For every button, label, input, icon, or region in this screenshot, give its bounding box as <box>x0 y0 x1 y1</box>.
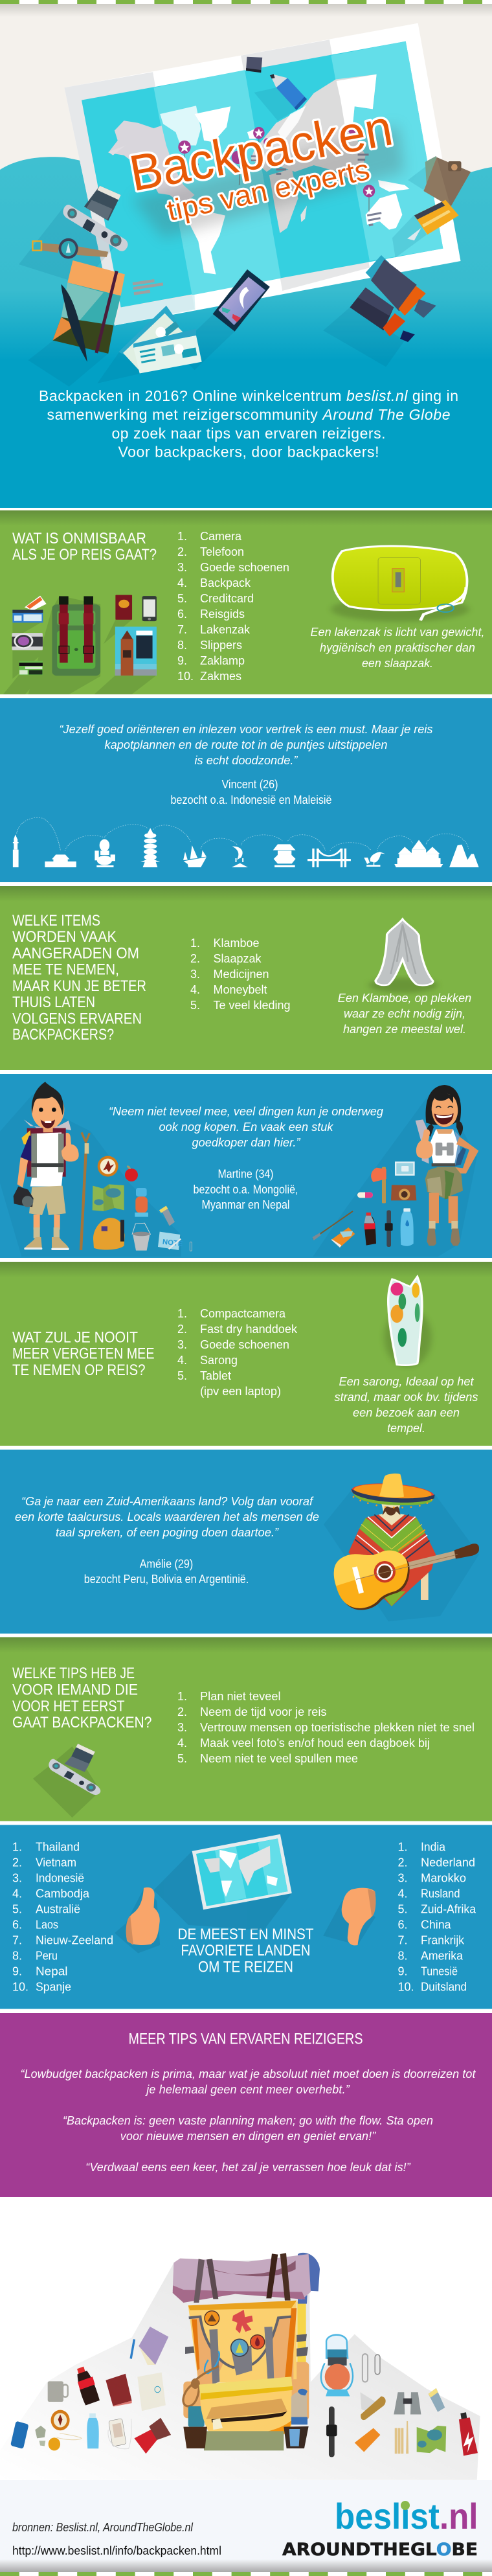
list of essentials: 1. <box>177 530 187 543</box>
caption: lakenzak: een slaapzak. <box>362 657 433 670</box>
icon: tickets <box>12 596 47 622</box>
list of tips: 1. <box>177 1690 187 1703</box>
list of essentials: Creditcard <box>200 592 254 605</box>
list of overrated items <box>190 937 290 1012</box>
panel: welke items <box>0 886 492 1070</box>
icon: flashlight <box>159 1206 175 1226</box>
attribution: Amélie (29) <box>140 1557 193 1570</box>
panel: footer <box>0 2480 492 2576</box>
list: least favourite countries: 1. <box>397 1841 408 1854</box>
list of tips: Neem de tijd voor je reis <box>200 1705 326 1718</box>
icon: thumbs up <box>126 1887 160 1945</box>
caption: sarong <box>334 1375 478 1435</box>
quote: een korte taalcursus. Locals waarderen het als mensen de <box>15 1510 319 1523</box>
icon: note pad <box>158 1232 183 1250</box>
icon: passport <box>115 595 132 620</box>
icon: brown camera <box>391 1185 416 1200</box>
attribution <box>193 1167 298 1211</box>
list of must-haves: (ipv een laptop) <box>200 1385 281 1398</box>
illustration: female backpacker with gear <box>313 1085 478 1257</box>
list of overrated items: Te veel kleding <box>214 999 290 1012</box>
icon: smartphone <box>213 269 270 332</box>
icon: mountains <box>449 845 479 867</box>
list of tips: Vertrouw mensen op toeristische plekken niet te snel <box>200 1721 475 1734</box>
attribution: Vincent (26) <box>221 778 278 791</box>
quote: “Neem niet teveel mee, veel dingen kun je onderweg <box>109 1105 383 1118</box>
list: least favourite countries: Rusland <box>421 1887 460 1900</box>
icon: dolphin fountain <box>232 847 248 867</box>
icon: treasure map <box>137 2373 166 2411</box>
panel: backpack illustration <box>0 2197 492 2480</box>
list: least favourite countries: 2. <box>397 1856 408 1869</box>
heading: MEER TIPS VAN ERVAREN REIZIGERS <box>128 2030 363 2048</box>
icon: red notebook <box>106 2374 132 2406</box>
list of essentials: Slippers <box>200 639 242 652</box>
heading <box>12 912 146 1043</box>
heading: WELKE ITEMS <box>12 912 100 929</box>
icon: phone with earphones <box>108 2419 131 2449</box>
map continents <box>108 74 421 274</box>
list of essentials: 10. <box>177 670 194 683</box>
icon: notebook and pen <box>131 2327 168 2365</box>
icon: suspension bridge <box>308 849 351 867</box>
icon: eraser <box>246 57 262 73</box>
list of tips: Maak veel foto’s en/of houd een dagboek bij <box>200 1737 430 1750</box>
list of essentials: 9. <box>177 654 187 667</box>
list: most favourite countries: Nieuw-Zeeland <box>36 1934 113 1947</box>
quote: goedkoper dan hier.” <box>192 1136 301 1149</box>
list: least favourite countries: 6. <box>397 1919 408 1932</box>
url: http://www.beslist.nl/info/backpacken.html <box>12 2544 221 2557</box>
icon: whistle <box>49 2434 82 2450</box>
icon: apple <box>125 1165 138 1181</box>
list of overrated items: 1. <box>190 937 200 950</box>
figure: female backpacker <box>416 1085 478 1246</box>
quotes: “Backpacken is: geen vaste planning maken; go with the flow. Sta open <box>63 2114 433 2127</box>
figure: face and moustache <box>379 1504 405 1525</box>
icon: stones <box>35 2426 46 2446</box>
list: most favourite countries: Laos <box>36 1919 58 1932</box>
icons: safety pin and paperclip <box>363 2354 380 2382</box>
icon: photo camera <box>12 633 43 650</box>
heading: WAT IS ONMISBAAR <box>12 530 146 547</box>
heading: TE NEMEN OP REIS? <box>12 1362 145 1379</box>
icon: soda can <box>10 2421 29 2449</box>
list of tips <box>177 1690 475 1765</box>
icon: axe <box>371 1167 386 1203</box>
icon: wallet <box>423 156 471 207</box>
illustration: travel gear flat lay <box>3 595 157 694</box>
figure: poncho <box>348 1514 436 1606</box>
panel: welke tips <box>0 1637 492 1821</box>
list: least favourite countries: 10. <box>397 1981 414 1994</box>
list: most favourite countries: Australië <box>36 1903 80 1916</box>
base and nets <box>183 2389 309 2450</box>
caption: lakenzak <box>311 626 484 670</box>
icon: temple <box>273 844 296 867</box>
icon: sports watch <box>326 2406 337 2457</box>
quotes: je helemaal geen cent meer overhebt.” <box>144 2083 350 2096</box>
icon: mini map <box>192 1834 292 1909</box>
top checker strip <box>0 0 492 4</box>
list: most favourite countries: Nepal <box>36 1965 67 1978</box>
panel: wat is onmisbaar <box>0 510 492 694</box>
heading: ALS JE OP REIS GAAT? <box>12 546 157 564</box>
title: tips van experts <box>164 153 372 227</box>
illustration: travel map with objects <box>19 23 471 387</box>
list: least favourite countries: Frankrijk <box>421 1934 465 1947</box>
illustrations: gear around backpack <box>10 2327 478 2457</box>
list: least favourite countries: 3. <box>397 1872 408 1885</box>
heading: GAAT BACKPACKEN? <box>12 1714 151 1731</box>
quotes: “Verdwaal eens een keer, het zal je verrassen hoe leuk dat is!” <box>85 2161 411 2174</box>
list: most favourite countries: 4. <box>12 1887 22 1900</box>
list: most favourite countries: 2. <box>12 1856 22 1869</box>
list of essentials: Goede schoenen <box>200 561 289 574</box>
attribution: bezocht o.a. Mongolië, <box>193 1183 298 1196</box>
heading <box>12 1329 154 1379</box>
icon: plane tickets <box>118 306 202 374</box>
quote: “Ga je naar een Zuid-Amerikaans land? Volg dan vooraf <box>21 1495 314 1508</box>
illustration: big backpack <box>173 2253 320 2450</box>
icon: backpack straps <box>52 596 100 676</box>
front pocket <box>199 2377 293 2443</box>
list of essentials: Reisgids <box>200 608 245 621</box>
list of must-haves: 3. <box>177 1338 187 1351</box>
illustration: asian landmarks skyline <box>13 817 479 867</box>
icon: pill <box>357 1192 373 1198</box>
list: least favourite countries: 4. <box>397 1887 408 1900</box>
icon: folding map <box>93 1184 124 1211</box>
list of essentials <box>177 530 289 683</box>
photo: mosquito net <box>369 919 438 993</box>
quote: kapotplannen en de route tot in de puntjes uitstippelen <box>105 738 387 751</box>
caption: klamboe: Een Klamboe, op plekken <box>338 992 471 1005</box>
figure: sombrero <box>351 1474 435 1509</box>
icon: soda bottle <box>364 1213 376 1246</box>
list: most favourite countries: 9. <box>12 1965 22 1978</box>
list: most favourite countries: Vietnam <box>36 1856 76 1869</box>
icon: sport watch <box>385 1210 393 1247</box>
icon: book <box>355 2428 380 2452</box>
heading: WELKE TIPS HEB JE <box>12 1665 135 1682</box>
icon: note pad: NOTE <box>162 1238 183 1248</box>
list of overrated items: 4. <box>190 983 200 996</box>
heading: MAAR KUN JE BETER <box>12 977 146 995</box>
heading: DE MEEST EN MINST <box>177 1926 314 1943</box>
list of tips: Plan niet teveel <box>200 1690 281 1703</box>
icon: pagoda <box>140 828 160 867</box>
list of overrated items: 3. <box>190 968 200 981</box>
caption: sarong: tempel. <box>387 1422 425 1435</box>
icon: credit card <box>414 200 459 234</box>
caption: lakenzak: Een lakenzak is licht van gewicht, <box>311 626 484 639</box>
main body <box>188 2301 296 2385</box>
heading: THUIS LATEN <box>12 994 95 1011</box>
photo: sarong <box>385 1277 431 1367</box>
list of overrated items: Medicijnen <box>214 968 269 981</box>
caption: lakenzak: hygiënisch en praktischer dan <box>320 641 475 654</box>
icon: binoculars <box>394 2392 421 2415</box>
panel: quote Vincent <box>0 698 492 882</box>
icon: junk boat <box>183 845 207 867</box>
icon: gate <box>45 854 76 867</box>
list: most favourite countries: 6. <box>12 1919 22 1932</box>
illustration: male backpacker with gear <box>0 1082 192 1257</box>
list of tips: 5. <box>177 1752 187 1765</box>
icon: fishing rod <box>313 1211 353 1240</box>
badges <box>205 2310 265 2356</box>
list of must-haves: 1. <box>177 1307 187 1320</box>
list of essentials: Lakenzak <box>200 623 251 636</box>
caption: sarong: strand, maar ook bv. tijdens <box>334 1391 478 1404</box>
icon: book <box>331 1227 355 1248</box>
list: least favourite countries <box>397 1841 476 1994</box>
heading <box>12 530 157 564</box>
list: most favourite countries: Peru <box>36 1950 58 1963</box>
list of tips: 2. <box>177 1705 187 1718</box>
icon: compass <box>98 1156 118 1177</box>
icon: herons <box>364 852 385 867</box>
caption: sarong: een bezoek aan een <box>353 1406 460 1419</box>
list of must-haves <box>177 1307 298 1398</box>
list: most favourite countries: 8. <box>12 1950 22 1963</box>
long object shadows <box>19 87 437 387</box>
list: most favourite countries: 7. <box>12 1934 22 1947</box>
shovel <box>297 2253 320 2364</box>
list: least favourite countries: Nederland <box>421 1856 475 1869</box>
icon: walking stick <box>81 1132 89 1250</box>
quotes: “Lowbudget backpacken is prima, maar wat je absoluut niet moet doen is doorreizen tot <box>21 2068 476 2080</box>
figure: guitar <box>334 1544 479 1610</box>
shadow behind title <box>132 126 405 238</box>
icon: lantern <box>321 2335 353 2397</box>
heading <box>12 1665 151 1731</box>
list of essentials: Camera <box>200 530 242 543</box>
icon: flashlight <box>429 2388 445 2412</box>
heading: WAT ZUL JE NOOIT <box>12 1329 138 1346</box>
sleeping mat <box>173 2253 311 2303</box>
illustrations: map and thumbs <box>115 1834 375 1953</box>
icon: palace <box>394 840 443 867</box>
list of overrated items: 5. <box>190 999 200 1012</box>
list of essentials: 2. <box>177 545 187 558</box>
attribution <box>171 778 331 806</box>
icon: lantern <box>135 1188 148 1217</box>
list: least favourite countries: China <box>421 1919 451 1932</box>
list: most favourite countries: 5. <box>12 1903 22 1916</box>
sources: bronnen: Beslist.nl, AroundTheGlobe.nl <box>12 2521 194 2534</box>
icon: pocket knife <box>360 2392 386 2420</box>
list of overrated items: Moneybelt <box>214 983 267 996</box>
icon: notebook with feather <box>52 260 125 362</box>
panel: meer tips <box>0 2013 492 2197</box>
list of must-haves: Sarong <box>200 1354 238 1367</box>
illustration: mariachi with guitar <box>324 1474 479 1621</box>
icon: minaret <box>13 834 19 867</box>
icon: buddha statue <box>95 839 115 867</box>
icon: camera <box>63 186 128 251</box>
attribution <box>84 1557 249 1586</box>
icon: thumbs down <box>342 1888 375 1945</box>
heading: AANGERADEN OM <box>12 944 139 963</box>
icon: water bottle <box>87 2413 99 2448</box>
heading <box>177 1926 314 1976</box>
icon: chocolate <box>134 2418 171 2454</box>
list of must-haves: Compactcamera <box>200 1307 286 1320</box>
map sheet <box>64 23 461 326</box>
icon: wristwatch <box>32 238 108 258</box>
list of overrated items: Slaapzak <box>214 952 262 965</box>
quote: is echt doodzonde.” <box>194 754 298 767</box>
quote: ook nog kopen. En vaak een stuk <box>159 1121 334 1134</box>
intro text <box>39 387 458 460</box>
list of tips: Neem niet te veel spullen mee <box>200 1752 358 1765</box>
map pins and labels <box>133 124 383 295</box>
intro text: samenwerking met reizigerscommunity Around The Globe <box>47 406 451 423</box>
list: least favourite countries: Marokko <box>421 1872 466 1885</box>
icon: marker <box>270 74 307 110</box>
intro text: op zoek naar tips van ervaren reizigers. <box>111 425 386 442</box>
list of must-haves: 2. <box>177 1323 187 1336</box>
heading: MEER VERGETEN MEE <box>12 1345 154 1363</box>
caption: sarong: Een sarong, Ideaal op het <box>339 1375 475 1388</box>
list: most favourite countries: 1. <box>12 1841 22 1854</box>
list of essentials: 6. <box>177 608 187 621</box>
carabiner and rope <box>183 2351 219 2427</box>
quote <box>60 723 432 767</box>
icon: folding map <box>417 2426 446 2453</box>
caption: klamboe: waar ze echt nodig zijn, <box>344 1007 465 1020</box>
list: most favourite countries: 10. <box>12 1981 28 1994</box>
list of essentials: Zakmes <box>200 670 241 683</box>
list: least favourite countries: Tunesië <box>421 1965 458 1978</box>
list: least favourite countries: 9. <box>397 1965 408 1978</box>
list: most favourite countries: 3. <box>12 1872 22 1885</box>
list: most favourite countries <box>12 1841 113 1994</box>
icon: phone map <box>142 596 157 621</box>
list of essentials: 3. <box>177 561 187 574</box>
icon: safety pin <box>190 1242 192 1251</box>
list of must-haves: 5. <box>177 1369 187 1382</box>
bottom checker strip <box>0 2572 492 2576</box>
heading: BACKPACKERS? <box>12 1026 114 1043</box>
list of must-haves: Fast dry handdoek <box>200 1323 298 1336</box>
list: least favourite countries: Duitsland <box>421 1981 467 1994</box>
quote: taal spreken, of een poging doen daartoe.” <box>56 1526 279 1539</box>
list of overrated items: Klamboe <box>214 937 259 950</box>
attribution: Myanmar en Nepal <box>202 1198 290 1211</box>
panel: quote Martine <box>0 1074 492 1258</box>
heading: WORDEN VAAK <box>12 928 117 946</box>
list: least favourite countries: India <box>421 1841 446 1854</box>
panel: favoriete landen <box>0 1825 492 2009</box>
icon: matches <box>395 2421 408 2454</box>
list of overrated items: 2. <box>190 952 200 965</box>
icon: bank card <box>19 661 43 675</box>
heading: VOLGENS ERVAREN <box>12 1010 142 1027</box>
list: most favourite countries: Cambodja <box>36 1887 90 1900</box>
list: least favourite countries: Zuid-Afrika <box>421 1903 476 1916</box>
list: least favourite countries: 8. <box>397 1950 408 1963</box>
list: least favourite countries: 5. <box>397 1903 408 1916</box>
icon: red sports bottle <box>457 2411 478 2456</box>
list of essentials: 4. <box>177 576 187 589</box>
heading: FAVORIETE LANDEN <box>181 1942 311 1959</box>
quote <box>15 1495 319 1539</box>
icon: camera <box>33 1744 100 1818</box>
attribution: bezocht o.a. Indonesië en Maleisië <box>171 793 331 806</box>
attribution: Martine (34) <box>218 1167 273 1180</box>
list: most favourite countries: Spanje <box>36 1981 71 1994</box>
side pockets <box>183 2334 309 2421</box>
title: Backpacken <box>125 99 397 202</box>
attribution: bezocht Peru, Bolivia en Argentinië. <box>84 1573 249 1586</box>
list of essentials: Telefoon <box>200 545 244 558</box>
heading: VOOR HET EERST <box>12 1698 125 1715</box>
list of tips: 4. <box>177 1737 187 1750</box>
heading: MEE TE NEMEN, <box>12 961 119 979</box>
panel: quote Amélie <box>0 1450 492 1634</box>
icon: photo frame <box>395 1161 415 1176</box>
logo: beslist.nl: beslist.nl <box>335 2496 478 2536</box>
list of essentials: Zaklamp <box>200 654 245 667</box>
icon: enamel mug <box>48 2381 68 2402</box>
icon: guidebook city <box>115 627 157 676</box>
intro text: Backpacken in 2016? Online winkelcentrum beslist.nl ging in <box>39 387 458 404</box>
list: least favourite countries: 7. <box>397 1934 408 1947</box>
logo: around the globe: AROUNDTHEGL OBE <box>282 2540 478 2560</box>
quote <box>109 1105 383 1149</box>
caption: klamboe <box>338 992 471 1036</box>
icon: water bottle <box>401 1208 414 1246</box>
icon: daypack <box>93 1218 125 1250</box>
quotes <box>21 2068 476 2174</box>
list of tips: 3. <box>177 1721 187 1734</box>
intro text: Voor backpackers, door backpackers! <box>118 443 379 460</box>
quotes: voor nieuwe mensen en dingen en geniet ervan!” <box>120 2130 376 2143</box>
list: most favourite countries: Thailand <box>36 1841 80 1854</box>
quote: “Jezelf goed oriënteren en inlezen voor vertrek is een must. Maar je reis <box>60 723 432 736</box>
list of essentials: Backpack <box>200 576 251 589</box>
icon: compass <box>51 2410 70 2430</box>
list of must-haves: Goede schoenen <box>200 1338 289 1351</box>
caption: klamboe: hangen ze meestal wel. <box>343 1023 466 1036</box>
heading: OM TE REIZEN <box>198 1959 293 1976</box>
icon: bucket <box>132 1223 151 1251</box>
list of essentials: 5. <box>177 592 187 605</box>
list: least favourite countries: Amerika <box>421 1950 464 1963</box>
icon: binoculars <box>350 255 436 342</box>
icon: cola bottle <box>74 2365 100 2406</box>
panel: hero header <box>0 0 492 508</box>
list: most favourite countries: Indonesië <box>36 1872 84 1885</box>
photo: sleeping bag liner <box>331 546 469 622</box>
heading: VOOR IEMAND DIE <box>12 1681 138 1698</box>
figure: male backpacker <box>14 1082 79 1250</box>
panel: wat zul je nooit <box>0 1262 492 1446</box>
list of must-haves: 4. <box>177 1354 187 1367</box>
list of essentials: 7. <box>177 623 187 636</box>
list of essentials: 8. <box>177 639 187 652</box>
list of must-haves: Tablet <box>200 1369 231 1382</box>
decorative teal wave <box>0 157 492 508</box>
